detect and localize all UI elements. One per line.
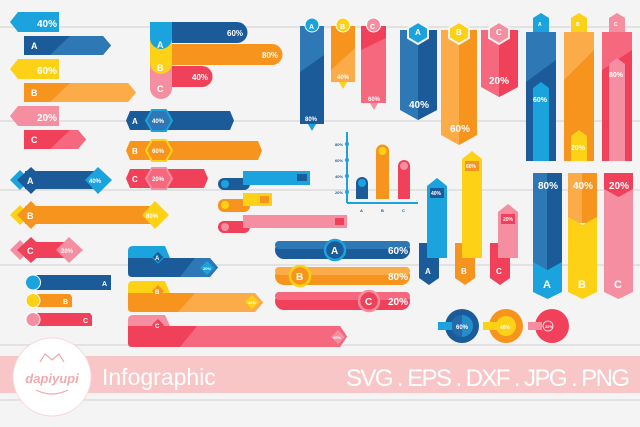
group: small circle bars (26, 275, 111, 326)
group: pill progress bars: 60% (388, 246, 408, 257)
group: pill progress bars (275, 240, 410, 311)
bar chart: A (360, 208, 363, 213)
group: hexagon bars: 40% (152, 119, 165, 125)
group: rounded ABC bars: 60% (227, 29, 243, 38)
group: folded tab bars: 20% (203, 266, 211, 271)
group: hexagon banners (400, 22, 518, 145)
group: folded tab bars: 42% (248, 300, 256, 305)
tag C 20% (10, 106, 86, 149)
group: small circle bars: A (102, 281, 107, 288)
group: hexagon bars (126, 110, 262, 189)
tag C 20%: 20% (37, 113, 57, 124)
group: diamond bars: 20% (61, 249, 74, 255)
group: hexagon banners: 20% (489, 76, 509, 87)
group: tall right columns: 80% (609, 72, 624, 79)
group: tall right columns: A (538, 22, 542, 28)
group: circle badges: 20% (545, 324, 553, 329)
group: top-left arrow tags (10, 12, 136, 149)
group: bottom right pentagon columns: 20% (609, 181, 629, 192)
group: small circle bars: C (83, 318, 88, 325)
group: hexagon banners: 60% (450, 124, 470, 135)
formats: SVG . EPS . DXF . JPG . PNG (346, 365, 630, 392)
group: top vertical ribbons: A (309, 24, 314, 31)
group: top vertical ribbons (300, 18, 386, 131)
logo: dapiyupi (25, 371, 79, 386)
group: vertical arrows: 20% (503, 217, 514, 223)
group: diamond bars: 40% (89, 179, 102, 185)
bar chart: 20% (335, 190, 343, 195)
group: pill progress bars: C (365, 297, 372, 308)
group: top vertical ribbons: B (340, 24, 345, 31)
group: folded tab bars: C (155, 324, 160, 330)
heading: Infographic: Infographic (102, 364, 216, 390)
bar chart: 60% (335, 158, 343, 163)
bar chart: B (381, 208, 384, 213)
group: diamond bars (10, 167, 169, 263)
group: bottom right pentagon columns: 80% (538, 181, 558, 192)
group: vertical arrows: 60% (466, 164, 477, 170)
tag A 40% (10, 12, 111, 55)
tag C 20%: C (31, 135, 38, 145)
group: vertical arrows: B (461, 267, 467, 276)
group: bottom right pentagon columns: C (614, 279, 622, 291)
group: small flag bars (218, 171, 347, 233)
group: pill progress bars: A (331, 246, 338, 257)
group: vertical arrows: 40% (431, 191, 442, 197)
group: pill progress bars: 20% (388, 297, 408, 308)
group: circle badges (438, 309, 569, 343)
group: folded tab bars: 80% (333, 335, 341, 340)
bar chart: 40% (335, 174, 343, 179)
group: folded tab bars: A (155, 256, 160, 262)
group: vertical arrows (419, 151, 518, 285)
tag B 60%: B (31, 88, 38, 98)
group: top vertical ribbons: 80% (305, 117, 318, 123)
group: hexagon banners: A (415, 28, 421, 37)
banner (0, 338, 640, 416)
bar chart: 80% (335, 142, 343, 147)
group: hexagon bars: 20% (152, 177, 165, 183)
group: top vertical ribbons: 60% (368, 97, 381, 103)
group: folded tab bars (128, 246, 347, 347)
group: vertical arrows: A (425, 267, 431, 276)
group: diamond bars: C (27, 246, 34, 256)
group: bottom right pentagon columns (533, 173, 633, 299)
group: bottom right pentagon columns: A (543, 279, 551, 291)
group: pill progress bars: B (296, 272, 303, 283)
group: small circle bars: B (63, 299, 68, 306)
group: bottom right pentagon columns: B (578, 279, 586, 291)
group: diamond bars: A (27, 176, 34, 186)
group: diamond bars: B (27, 211, 34, 221)
tag B 60% (10, 59, 136, 102)
group: hexagon banners: C (496, 28, 502, 37)
group: hexagon banners: B (456, 28, 462, 37)
group: circle badges: 40% (500, 325, 511, 331)
group: diamond bars: 80% (146, 214, 159, 220)
group: tall right columns: 20% (571, 145, 586, 152)
bar chart: C (402, 208, 405, 213)
group: tall right columns: B (576, 22, 580, 28)
group: top vertical ribbons: 40% (337, 75, 350, 81)
logo (13, 338, 91, 416)
group: hexagon bars: B (132, 147, 138, 156)
group: hexagon bars: C (132, 175, 138, 184)
group: folded tab bars: B (155, 290, 160, 296)
group: hexagon banners: 40% (409, 100, 429, 111)
group: hexagon bars: A (132, 117, 138, 126)
group: rounded ABC bars: C (157, 84, 164, 94)
tag B 60%: 60% (37, 66, 57, 77)
group: tall right columns (526, 13, 632, 161)
group: bottom right pentagon columns: 40% (573, 181, 593, 192)
group: tall right columns: 60% (533, 97, 548, 104)
group: rounded ABC bars: B (157, 63, 164, 73)
tag A 40%: 40% (37, 19, 57, 30)
group: pill progress bars: 80% (388, 272, 408, 283)
group: rounded ABC bars: 80% (262, 51, 278, 60)
group: circle badges: 60% (456, 325, 469, 331)
bar chart (335, 132, 418, 213)
tag A 40%: A (31, 41, 38, 51)
group: rounded ABC bars: A (157, 40, 164, 50)
group: tall right columns: C (614, 22, 618, 28)
group: rounded ABC bars: 40% (192, 73, 208, 82)
group: rounded ABC bars (150, 22, 282, 99)
group: top vertical ribbons: C (370, 24, 375, 31)
group: hexagon bars: 60% (152, 149, 165, 155)
group: vertical arrows: C (496, 267, 502, 276)
